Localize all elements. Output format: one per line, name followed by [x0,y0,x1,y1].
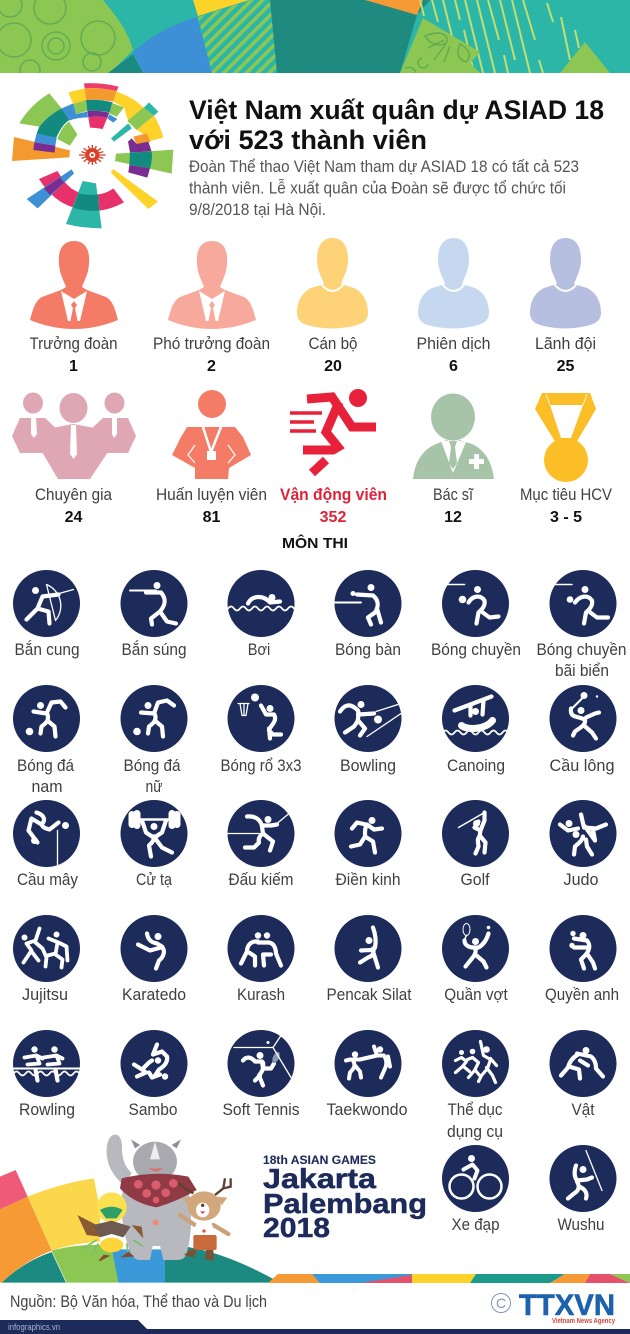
sport: Bóng rổ 3x3 [220,685,302,775]
sport: Soft Tennis [222,1030,300,1119]
sport: Bóng rổ 3x3: Bóng rổ 3x3 [220,756,302,775]
sport: Điền kinh: Điền kinh [336,870,400,889]
sport: Cầu lông: Cầu lông [550,756,614,775]
sport: Jujitsu [13,915,80,1004]
label: Chuyên gia 24: 24 [65,509,82,526]
sport: Karatedo [120,915,188,1004]
sport: Bóng đá nam: Bóng đá [17,756,74,775]
sport: Bóng chuyền [431,570,521,659]
sport: Cử tạ: Cử tạ [136,870,172,889]
label: Bác sĩ 12: 12 [444,509,462,526]
mascot: rhino scarf [120,1174,197,1207]
sport: Bóng đá nữ: nữ [146,777,162,796]
label: Cán bộ 20: Cán bộ [308,334,358,353]
sport: Judo: Judo [564,870,598,889]
label: Lãnh đội 25: Lãnh đội [535,334,596,353]
sport: Golf [442,800,509,889]
icon: Trưởng đoàn [30,241,118,329]
label: Cán bộ 20: 20 [324,358,342,375]
logo text: Jakarta Palembang 2018: Palembang [263,1188,427,1219]
label: Mục tiêu HCV 3 - 5: Mục tiêu HCV [520,485,613,504]
intro text: 9/8/2018 tại Hà Nội. [189,200,326,219]
label: Huấn luyện viên 81: Huấn luyện viên [156,485,267,504]
sport: Thể dục dụng cụ: Thể dục [448,1100,503,1119]
label: Chuyên gia 24 [35,485,112,526]
sport: Bóng chuyền bãi biển: bãi biển [555,661,609,680]
heading: Môn thi: MÔN THI [282,534,348,552]
label: Vận động viên 352: Vận động viên [280,485,387,504]
logo text: Jakarta Palembang 2018: 18th ASIAN GAMES [263,1153,376,1167]
copyright TTXVN logo: C [496,1295,506,1311]
icon: Phiên dịch [418,238,489,328]
intro text: Đoàn Thể thao Việt Nam tham dự ASIAD 18 có tất cả 523 [189,157,579,176]
label: Trưởng đoàn 1: Trưởng đoàn [30,334,118,353]
sport: Taekwondo: Taekwondo [326,1100,408,1119]
sport: Quyền anh: Quyền anh [545,985,619,1004]
sport: Bóng bàn: Bóng bàn [335,640,401,659]
footer bar: infographics.vn [8,1322,60,1332]
sport: Soft Tennis: Soft Tennis [222,1100,300,1119]
sport: Bóng đá nam [13,685,80,796]
logo text: Jakarta Palembang 2018: Jakarta [263,1163,376,1194]
colourful hills [0,1170,630,1283]
sport: Bóng chuyền bãi biển [536,570,626,680]
sport: Wushu: Wushu [558,1215,604,1234]
label: Chuyên gia 24: Chuyên gia [35,485,112,504]
sport: Canoing: Canoing [447,756,505,775]
sport: Bắn cung: Bắn cung [14,640,80,659]
logo text: Jakarta Palembang 2018 [263,1153,427,1243]
sport: Đấu kiếm [228,800,294,889]
icon: Chuyên gia [12,392,136,479]
sport: Bắn cung [13,570,80,659]
sport: Thể dục dụng cụ: dụng cụ [447,1122,503,1141]
label: Cán bộ 20 [308,334,358,375]
top banner [0,0,630,80]
sport: Quần vợt [442,915,509,1004]
sport: Bơi: Bơi [248,640,270,659]
sport: Cầu mây: Cầu mây [17,870,78,889]
label: Mục tiêu HCV 3 - 5 [520,485,613,526]
logo text: Jakarta Palembang 2018: 2018 [263,1212,330,1243]
copyright TTXVN logo: Vietnam News Agency [552,1318,615,1325]
sport: Điền kinh [334,800,402,889]
label: Trưởng đoàn 1: 1 [69,358,78,375]
label: Vận động viên 352 [280,485,387,526]
label: Phó trưởng đoàn 2 [153,334,270,375]
sport: Bóng chuyền: Bóng chuyền [431,640,521,659]
label: Phiên dịch 6 [416,334,490,375]
sport: Bowling [334,685,402,775]
icon: Lãnh đội [530,238,601,328]
mascot: rhino [107,1135,191,1260]
icon: Phó trưởng đoàn [168,241,256,329]
copyright TTXVN logo: TTXVN [519,1289,615,1322]
sport: Bơi [228,570,294,659]
mascots [77,1135,231,1261]
sport: Quyền anh [545,915,619,1004]
icon: Huấn luyện viên [172,390,251,479]
sport: Bowling: Bowling [340,756,396,775]
sport: Rowling: Rowling [19,1100,75,1119]
label: Trưởng đoàn 1 [30,334,118,375]
label: Lãnh đội 25: 25 [557,358,574,375]
sport: Pencak Silat [326,915,412,1004]
mascot: bird [77,1192,143,1261]
label: Phiên dịch 6: 6 [449,358,458,375]
sport: Taekwondo [326,1030,408,1119]
label: Phiên dịch 6: Phiên dịch [416,334,490,353]
sport: Vật: Vật [572,1100,595,1119]
label: Bác sĩ 12 [433,485,474,526]
icon: sun star [79,145,106,165]
icon: medal [535,393,596,482]
logo: Asian Games 2018 [12,83,173,228]
title: Việt Nam xuất quân dự ASIAD 18 [189,95,604,125]
sport: Sambo [120,1030,188,1119]
sport: Wushu [550,1145,616,1234]
sport: Cầu lông [550,685,616,775]
sport: Bắn súng: Bắn súng [122,640,186,659]
sport: Bóng đá nữ: Bóng đá [124,756,181,775]
footer bar [0,1320,630,1334]
sport: Pencak Silat: Pencak Silat [326,985,412,1004]
mascot: deer [178,1178,231,1261]
sport: Thể dục dụng cụ [442,1030,509,1141]
icon: Cán bộ [297,238,368,328]
sport: Bóng đá nữ [120,685,188,796]
label: Huấn luyện viên 81 [156,485,267,526]
sport: Canoing [442,685,509,775]
sport: Jujitsu: Jujitsu [22,985,68,1004]
icon: Bác sĩ [413,394,494,479]
label: Phó trưởng đoàn 2: Phó trưởng đoàn [153,334,270,353]
sport: Bóng bàn [334,570,402,659]
title: với 523 thành viên [189,125,427,155]
sport: Cầu mây [13,800,80,889]
sport: Sambo: Sambo [128,1100,178,1119]
label: Huấn luyện viên 81: 81 [203,509,220,526]
sport: Quần vợt: Quần vợt [444,985,508,1004]
label: Vận động viên 352: 352 [320,509,346,526]
sport: Bóng đá nam: nam [32,777,62,796]
icon: Vận động viên runner [290,389,376,473]
sport: Đấu kiếm: Đấu kiếm [228,870,294,889]
sport: Karatedo: Karatedo [122,985,186,1004]
sport: Golf: Golf [460,870,490,889]
label: Bác sĩ 12: Bác sĩ [433,485,474,504]
label: Phó trưởng đoàn 2: 2 [207,358,216,375]
sport: Rowling [13,1030,80,1119]
label: Mục tiêu HCV 3 - 5: 3 - 5 [550,509,582,526]
sport: Judo [550,800,616,889]
sport: Bắn súng [120,570,188,659]
sport: Xe đạp [442,1145,509,1234]
intro text: thành viên. Lễ xuất quân của Đoàn sẽ được tổ chức tối [189,178,566,198]
sport: Kurash [228,915,294,1004]
label: Lãnh đội 25 [535,334,596,375]
sport: Xe đạp: Xe đạp [452,1215,500,1234]
source: Nguồn: Bộ Văn hóa, Thể thao và Du lịch [10,1292,267,1311]
sport: Kurash: Kurash [237,985,285,1004]
sport: Vật [550,1030,616,1119]
sport: Cử tạ [120,800,188,889]
